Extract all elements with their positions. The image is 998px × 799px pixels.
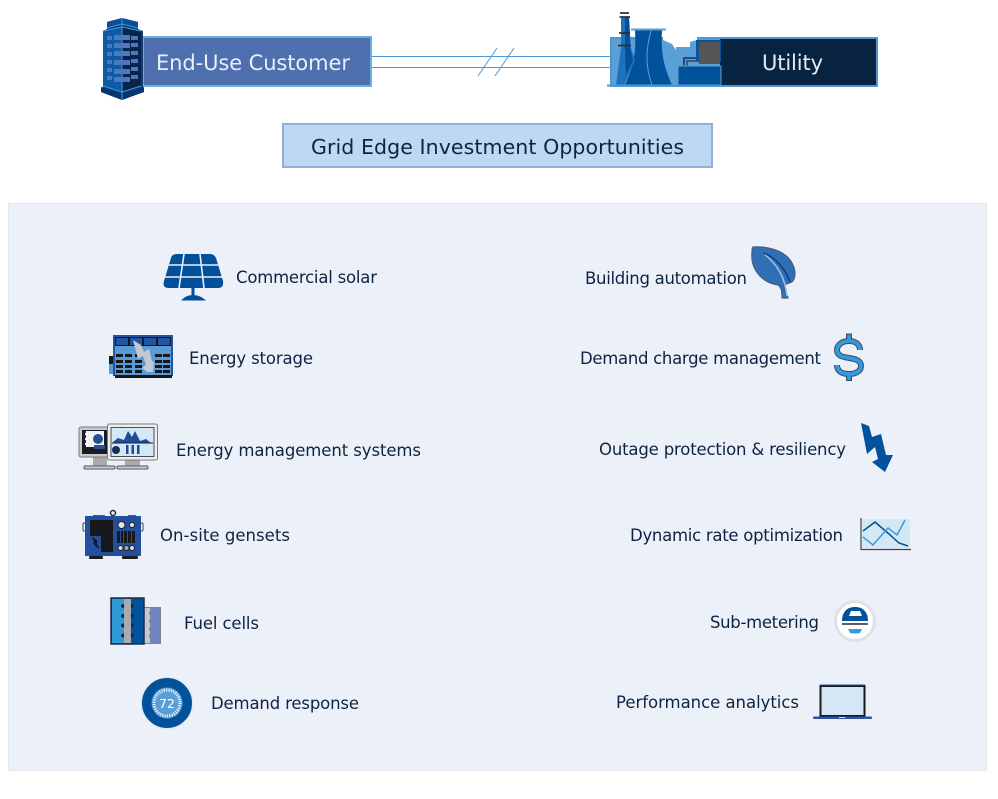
icon: dollar sign — [837, 334, 861, 381]
item: performance analytics: Performance analytics — [616, 693, 799, 712]
heading: grid edge investment opportunities: Grid Edge Investment Opportunities — [311, 135, 684, 159]
item: sub-metering — [710, 602, 874, 640]
item: fuel cells — [111, 598, 259, 644]
item: on-site gensets — [83, 510, 290, 559]
item: commercial solar — [164, 254, 377, 300]
panel: end-use customer — [143, 37, 371, 86]
item: dynamic rate optimization: Dynamic rate optimization — [630, 526, 843, 545]
item: energy management systems — [79, 424, 421, 469]
item: dynamic rate optimization — [630, 518, 911, 550]
icon: laptop — [813, 685, 872, 719]
icon: office building — [101, 18, 144, 100]
icon: battery storage — [109, 335, 173, 378]
item: outage protection and resiliency — [599, 423, 893, 472]
icon: line chart — [861, 518, 911, 550]
icon: meter — [836, 602, 874, 640]
heading: grid edge investment opportunities — [283, 124, 712, 167]
item: performance analytics — [616, 685, 872, 719]
icon: fuel cell stack — [111, 598, 160, 644]
item: building automation — [585, 247, 795, 298]
item: energy management systems: Energy management systems — [176, 441, 421, 460]
item: energy storage — [109, 335, 313, 378]
panel: utility — [611, 38, 877, 86]
icon: leaf — [752, 247, 795, 298]
panel: utility: Utility — [762, 51, 823, 75]
icon: lightning bolt — [861, 423, 893, 472]
item: demand response: Demand response — [211, 694, 359, 713]
item: energy storage: Energy storage — [189, 349, 313, 368]
item: outage protection and resiliency: Outage protection & resiliency — [599, 440, 846, 459]
icon: thermostat: 72 — [159, 696, 175, 711]
icon: generator — [83, 510, 143, 559]
item: fuel cells: Fuel cells — [184, 614, 259, 633]
item: demand charge management — [580, 334, 861, 381]
connection lines between customer and utility — [372, 48, 610, 76]
panel: investment opportunities background — [8, 204, 986, 770]
icon: power plant — [607, 13, 721, 86]
item: building automation: Building automation — [585, 269, 747, 288]
item: sub-metering: Sub-metering — [710, 613, 819, 632]
icon: thermostat — [142, 678, 192, 728]
icon: computer monitors — [79, 424, 158, 469]
item: on-site gensets: On-site gensets — [160, 526, 290, 545]
item: commercial solar: Commercial solar — [236, 268, 377, 287]
item: demand response — [142, 678, 359, 728]
panel: end-use customer: End-Use Customer — [156, 51, 350, 75]
icon: solar panel — [164, 254, 223, 300]
item: demand charge management: Demand charge management — [580, 349, 822, 368]
